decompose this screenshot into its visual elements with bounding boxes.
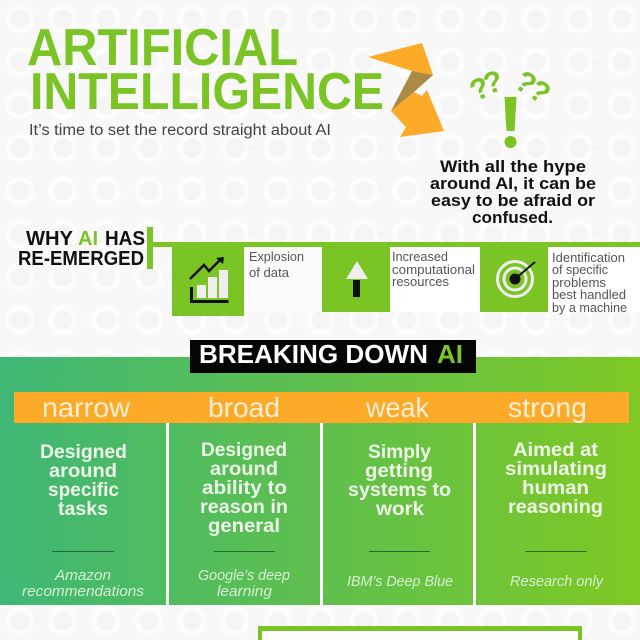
column: broad: reason in xyxy=(200,497,288,518)
orange header band: weak xyxy=(365,392,430,423)
column: strong: Aimed at xyxy=(513,440,599,461)
label: increased computational resources: Increased xyxy=(392,249,448,264)
column: strong: simulating xyxy=(505,459,607,480)
icon: rising bar chart xyxy=(190,257,228,302)
heading: why AI has re-emerged: HAS xyxy=(105,227,145,250)
column: broad xyxy=(198,440,290,600)
icon: question marks and exclamation mark: ? xyxy=(508,64,542,102)
heading: breaking down AI: AI xyxy=(437,339,463,369)
column: broad: Designed xyxy=(201,440,287,461)
column: narrow: recommendations xyxy=(22,583,145,600)
column: narrow: Amazon xyxy=(54,567,111,584)
heading: why AI has re-emerged: WHY xyxy=(26,227,73,250)
icon: question marks and exclamation mark: ? xyxy=(480,64,507,101)
panel: increased computational resources xyxy=(322,247,480,312)
label: increased computational resources: resources xyxy=(392,274,449,289)
heading: why AI has re-emerged: RE-EMERGED xyxy=(18,247,144,270)
label: identification of specific problems: of specific xyxy=(552,262,608,277)
orange header band xyxy=(14,392,629,423)
column: broad: around xyxy=(210,459,278,480)
panel: bottom box cut off by page edge xyxy=(258,626,582,640)
column dividers xyxy=(166,423,476,605)
title: ARTIFICIAL xyxy=(27,19,298,77)
column: weak: work xyxy=(375,499,424,520)
icon: question marks and exclamation mark: ? xyxy=(465,71,495,108)
label: explosion of data: Explosion xyxy=(249,249,304,264)
panel: identification of specific problems xyxy=(480,247,640,315)
title xyxy=(27,19,384,121)
column: narrow: specific xyxy=(48,480,119,501)
column: narrow: Designed xyxy=(40,442,127,463)
icon: question marks and exclamation mark xyxy=(465,64,556,148)
column: broad: ability to xyxy=(202,478,287,499)
panel: breaking down AI background xyxy=(0,357,640,605)
icon: up arrow xyxy=(346,261,368,297)
icon: target xyxy=(498,262,535,296)
column: broad: learning xyxy=(217,583,273,600)
column: strong: human xyxy=(522,478,589,499)
column: weak: systems to xyxy=(348,480,451,501)
label: identification of specific problems: best handled xyxy=(552,287,626,302)
column: narrow: around xyxy=(49,461,117,482)
heading: breaking down AI: BREAKING DOWN xyxy=(199,339,428,369)
column: strong xyxy=(505,440,607,590)
title: INTELLIGENCE xyxy=(30,63,384,121)
orange header band: broad xyxy=(208,392,280,423)
label: identification of specific problems: problems xyxy=(552,275,607,290)
icon: orange folded lightning bolt xyxy=(368,43,444,137)
column: weak: getting xyxy=(365,461,433,482)
label: identification of specific problems xyxy=(552,250,627,315)
column: weak xyxy=(347,442,453,590)
callout: hype text xyxy=(430,157,596,227)
panel: explosion of data xyxy=(172,247,322,316)
icon: question marks and exclamation mark: ? xyxy=(522,73,556,111)
orange header band: narrow xyxy=(42,392,131,423)
heading: why AI has re-emerged: AI xyxy=(78,227,98,250)
callout: hype text: confused. xyxy=(472,208,553,227)
heading: why AI has re-emerged xyxy=(18,227,145,270)
label: explosion of data xyxy=(249,249,304,280)
column: strong: reasoning xyxy=(508,497,603,518)
label: identification of specific problems: by a machine xyxy=(552,300,627,315)
connector bar xyxy=(147,227,640,269)
label: explosion of data: of data xyxy=(249,265,290,280)
callout: hype text: around AI, it can be xyxy=(430,174,596,193)
column: weak: IBM’s Deep Blue xyxy=(347,573,453,590)
column: strong: Research only xyxy=(510,573,604,590)
orange header band: strong xyxy=(508,392,587,423)
column: broad: general xyxy=(208,516,280,537)
column: weak: Simply xyxy=(368,442,431,463)
label: increased computational resources: computational xyxy=(392,262,475,277)
label: increased computational resources xyxy=(392,249,475,289)
column: broad: Google’s deep xyxy=(198,567,290,584)
label: identification of specific problems: Identification xyxy=(552,250,625,265)
column: narrow: tasks xyxy=(58,499,108,520)
column: narrow xyxy=(22,442,145,600)
callout: hype text: easy to be afraid or xyxy=(431,191,595,210)
callout: hype text: With all the hype xyxy=(440,157,586,176)
subtitle: It’s time to set the record straight about AI xyxy=(29,122,331,139)
